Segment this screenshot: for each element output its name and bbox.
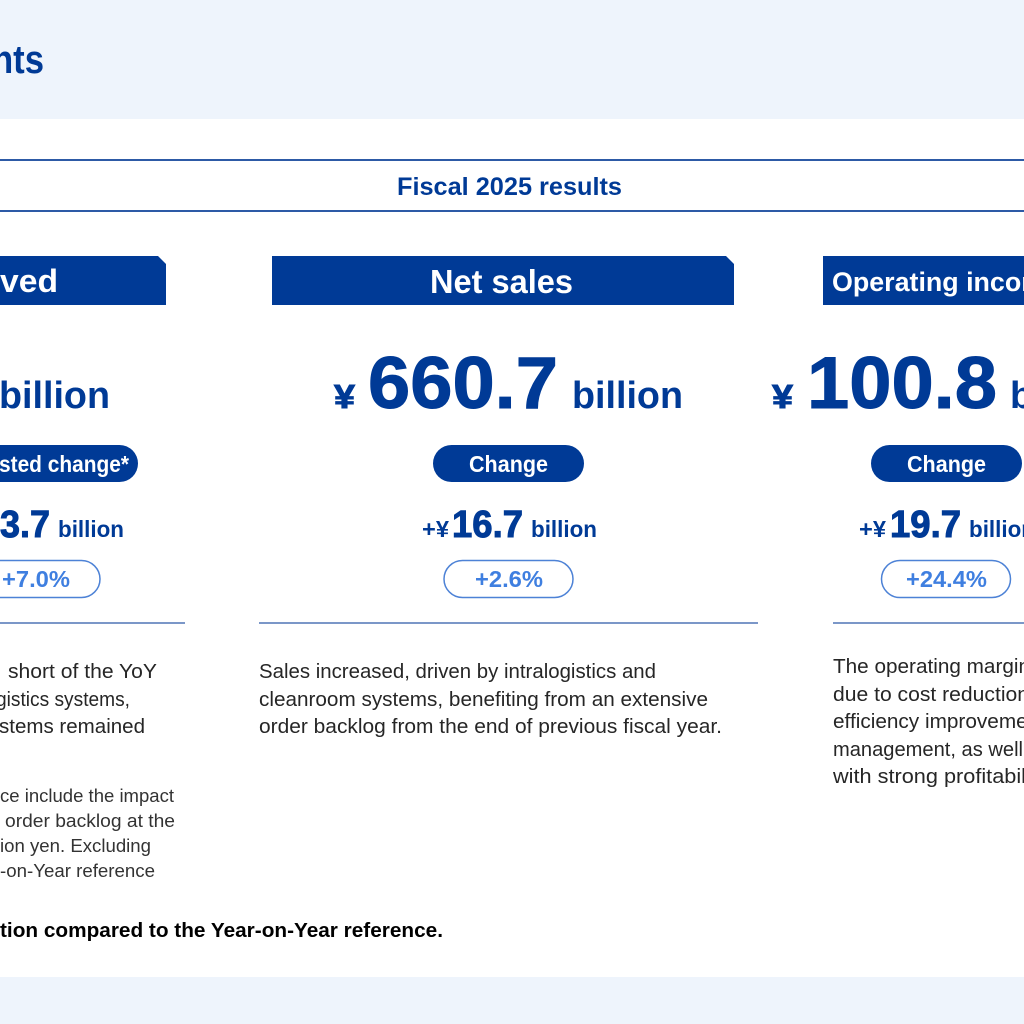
left column change amount: billion xyxy=(58,516,124,542)
panel: net sales xyxy=(259,256,758,738)
left column body text: short of the YoY xyxy=(8,661,157,683)
section heading: Fiscal 2025 results: Fiscal 2025 results xyxy=(397,173,622,201)
net sales banner xyxy=(272,256,734,305)
operating income change pill xyxy=(871,445,1022,482)
net sales percent pill: +2.6% xyxy=(475,566,543,592)
net sales value: billion xyxy=(572,375,683,417)
operating income banner xyxy=(823,256,1024,305)
operating income body text: with strong profitabil xyxy=(832,766,1024,788)
left column body text xyxy=(0,661,157,738)
operating income body text: The operating margin xyxy=(833,656,1024,678)
operating income percent pill xyxy=(882,560,1010,598)
operating income change amount xyxy=(859,504,1024,546)
operating income change pill: Change xyxy=(907,451,986,477)
net sales body text: cleanroom systems, benefiting from an extensive xyxy=(259,689,708,711)
net sales banner: Net sales xyxy=(430,263,573,300)
operating income body text: management, as well xyxy=(833,739,1023,761)
left column banner: ved xyxy=(0,263,58,299)
left column percent pill xyxy=(0,560,100,598)
net sales value: ¥ xyxy=(334,378,356,415)
left column note: order backlog at the xyxy=(5,811,175,831)
left column change amount xyxy=(0,504,124,546)
header band xyxy=(0,0,1024,119)
net sales value: 660.7 xyxy=(368,343,558,424)
net sales change pill xyxy=(433,445,584,482)
operating income body text xyxy=(832,656,1024,788)
operating income value: ¥ xyxy=(772,378,794,415)
left column body text: stems remained xyxy=(0,716,145,738)
footnote: tion compared to the Year-on-Year reference. xyxy=(0,920,443,942)
panel: operating income xyxy=(772,256,1024,788)
net sales body text xyxy=(259,661,722,738)
left column value: billion xyxy=(0,375,110,417)
net sales body text: Sales increased, driven by intralogistics and xyxy=(259,661,656,683)
operating income body text: due to cost reduction xyxy=(833,684,1024,706)
left column note: ion yen. Excluding xyxy=(0,836,151,856)
net sales change amount: +¥ xyxy=(422,516,449,542)
left column note: ce include the impact xyxy=(0,786,174,806)
net sales value xyxy=(334,343,683,424)
left column change pill xyxy=(0,445,138,482)
net sales body text: order backlog from the end of previous fiscal year. xyxy=(259,716,722,738)
left column percent pill: +7.0% xyxy=(2,566,70,592)
left column note: -on-Year reference xyxy=(0,861,155,881)
net sales change amount: 16.7 xyxy=(452,504,523,546)
net sales change pill: Change xyxy=(469,451,548,477)
operating income value: 100.8 xyxy=(807,343,997,424)
operating income change amount: +¥ xyxy=(859,516,886,542)
footer band xyxy=(0,977,1024,1024)
left column banner xyxy=(0,256,166,305)
net sales change amount xyxy=(422,504,597,546)
panel: left column xyxy=(0,256,185,881)
operating income change amount: 19.7 xyxy=(890,504,961,546)
left column note xyxy=(0,786,175,881)
left column change amount: 3.7 xyxy=(0,504,50,546)
operating income percent pill: +24.4% xyxy=(906,566,987,592)
left column body text: gistics systems, xyxy=(0,689,130,711)
net sales percent pill xyxy=(444,560,573,598)
left column change pill: sted change* xyxy=(0,451,129,477)
net sales change amount: billion xyxy=(531,516,597,542)
